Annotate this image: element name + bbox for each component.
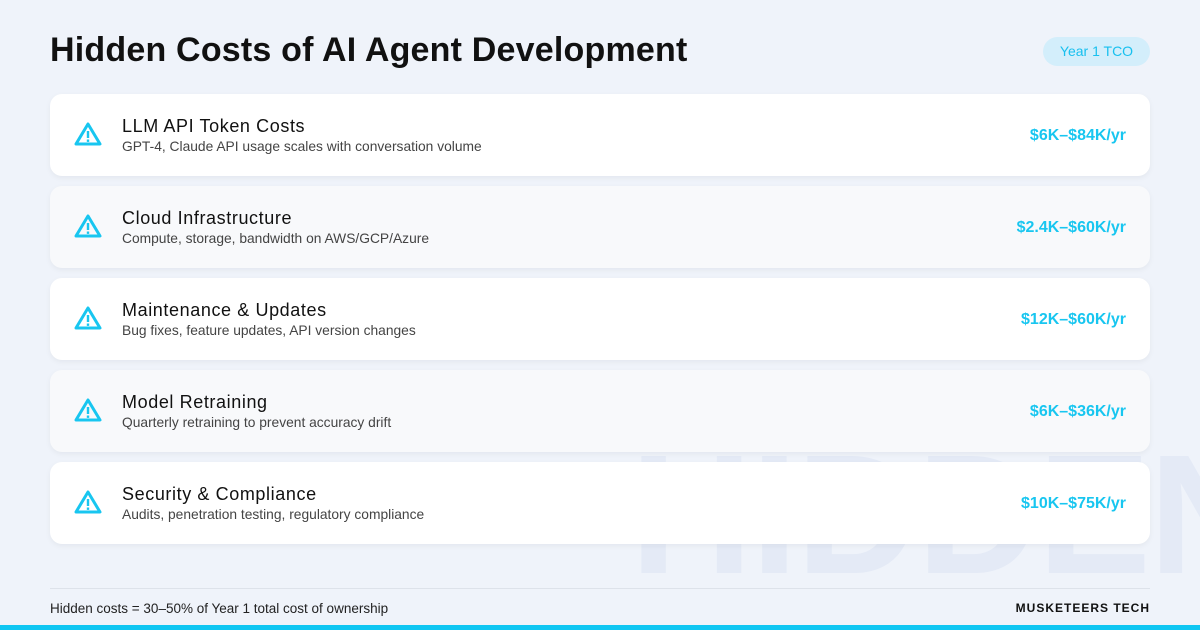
icon: warning	[74, 122, 102, 146]
card: Retraining: Model Retraining	[122, 392, 268, 412]
card: Security: $10K–$75K/yr	[1021, 495, 1126, 512]
icon: warning	[74, 214, 102, 238]
brand: MUSKETEERS TECH	[1016, 601, 1150, 615]
card: Cloud	[50, 186, 1150, 268]
icon: warning	[74, 398, 102, 422]
card: Maintenance: Maintenance & Updates	[122, 300, 327, 320]
badge	[1043, 37, 1150, 66]
icon: warning	[74, 490, 102, 514]
card: LLM API: LLM API Token Costs	[122, 116, 305, 136]
card: LLM API: $6K–$84K/yr	[1030, 127, 1126, 144]
card: LLM API: GPT-4, Claude API usage scales with conversation volume	[122, 139, 482, 154]
card: Security: Security & Compliance	[122, 484, 317, 504]
card: Retraining	[50, 370, 1150, 452]
footer note: Hidden costs = 30–50% of Year 1 total cost of ownership	[50, 601, 388, 616]
badge: Year 1 TCO	[1060, 43, 1133, 59]
card: Retraining: $6K–$36K/yr	[1030, 403, 1126, 420]
card: Security	[50, 462, 1150, 544]
card: Cloud: $2.4K–$60K/yr	[1017, 219, 1126, 236]
card: LLM API	[50, 94, 1150, 176]
card: Security: Audits, penetration testing, regulatory compliance	[122, 507, 424, 522]
card: Cloud: Compute, storage, bandwidth on AWS/GCP/Azure	[122, 231, 429, 246]
card: Maintenance: Bug fixes, feature updates, API version changes	[122, 323, 416, 338]
icon: warning	[74, 306, 102, 330]
card: Maintenance: $12K–$60K/yr	[1021, 311, 1126, 328]
card: Cloud: Cloud Infrastructure	[122, 208, 292, 228]
title: Hidden Costs of AI Agent Development	[50, 31, 688, 69]
card: Retraining: Quarterly retraining to prevent accuracy drift	[122, 415, 391, 430]
card: Maintenance	[50, 278, 1150, 360]
